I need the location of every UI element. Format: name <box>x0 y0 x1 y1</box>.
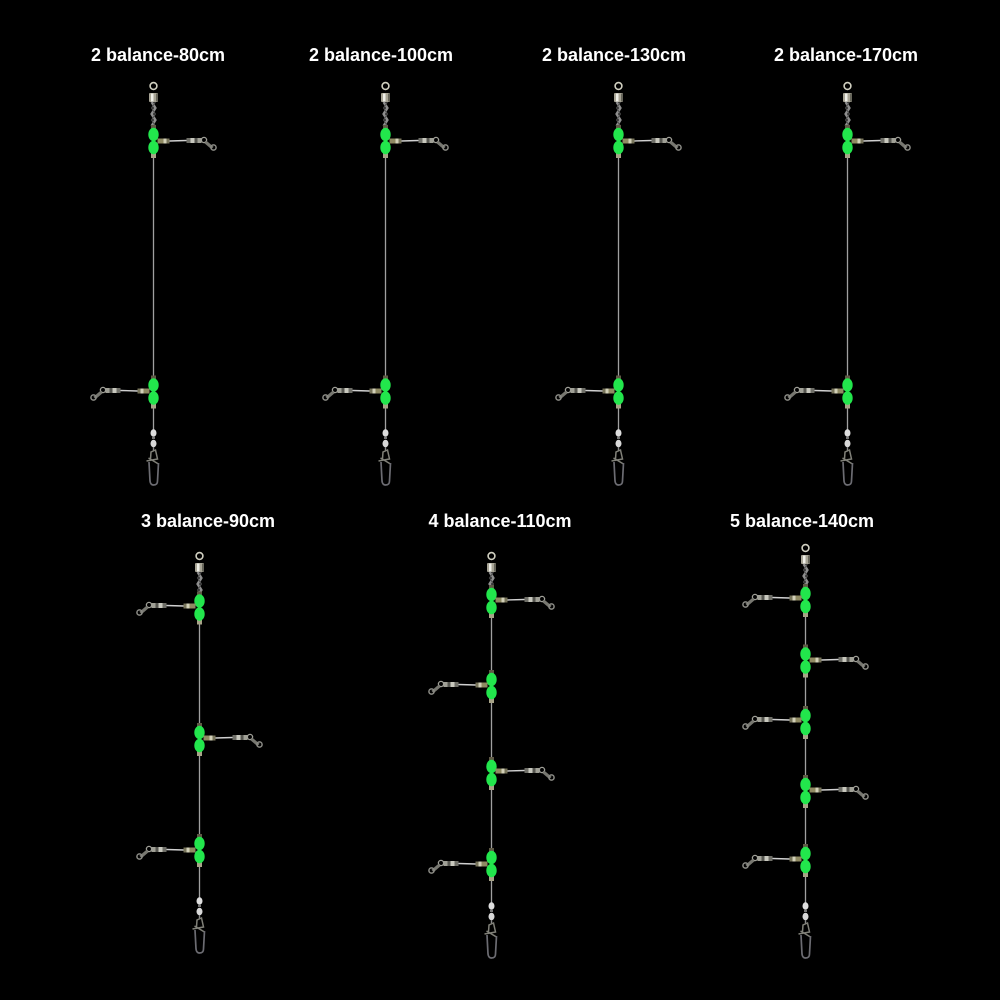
title: 2 balance-130cm: 2 balance-130cm <box>542 45 686 65</box>
title: 2 balance-80cm: 2 balance-80cm <box>91 45 225 65</box>
rig: 2 balance-130cm <box>556 83 681 485</box>
rig: 2 balance-100cm <box>323 83 448 485</box>
rig: 5 balance-140cm <box>743 545 868 958</box>
title: 5 balance-140cm: 5 balance-140cm <box>730 511 874 531</box>
title: 2 balance-100cm: 2 balance-100cm <box>309 45 453 65</box>
title: 3 balance-90cm: 3 balance-90cm <box>141 511 275 531</box>
rig: 2 balance-170cm <box>785 83 910 485</box>
title: 2 balance-170cm: 2 balance-170cm <box>774 45 918 65</box>
rig: 4 balance-110cm <box>429 553 554 958</box>
title: 4 balance-110cm: 4 balance-110cm <box>428 511 572 531</box>
rig: 3 balance-90cm <box>137 553 262 953</box>
rig: 2 balance-80cm <box>91 83 216 485</box>
